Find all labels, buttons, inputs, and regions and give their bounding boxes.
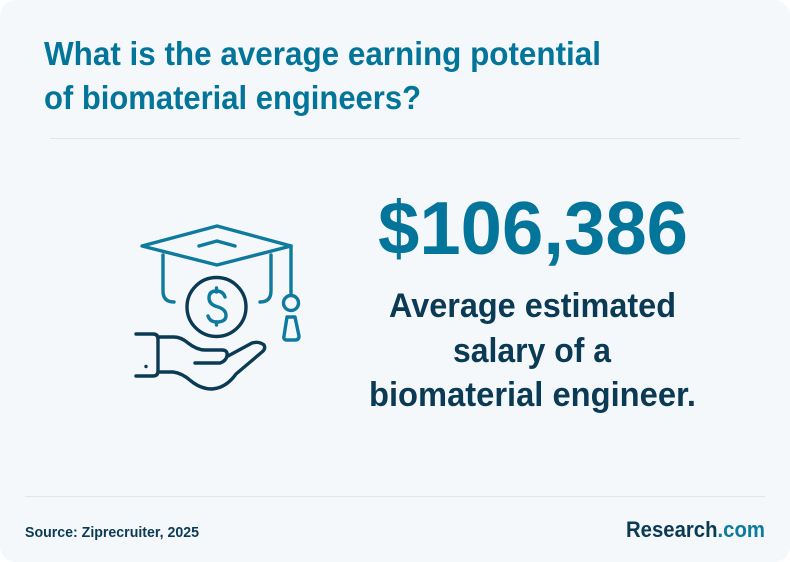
salary description: Average estimated xyxy=(389,287,676,325)
title: What is the average earning potential xyxy=(44,35,601,72)
source note: Source: Ziprecruiter, 2025 xyxy=(25,525,199,541)
logo: Research.com: Research.com xyxy=(626,517,765,542)
icon: dollar coin xyxy=(187,278,246,336)
title: of biomaterial engineers? xyxy=(44,79,421,116)
salary description xyxy=(369,287,696,414)
title xyxy=(44,35,601,116)
icon: cuff dot xyxy=(145,365,147,368)
icon: graduation cap xyxy=(142,226,299,340)
icon: open hand xyxy=(136,334,265,389)
salary description: salary of a xyxy=(453,332,612,370)
icon: graduation cap, coin and hand xyxy=(136,226,299,389)
big salary figure: $106,386 xyxy=(378,186,688,270)
salary description: biomaterial engineer. xyxy=(369,376,696,414)
